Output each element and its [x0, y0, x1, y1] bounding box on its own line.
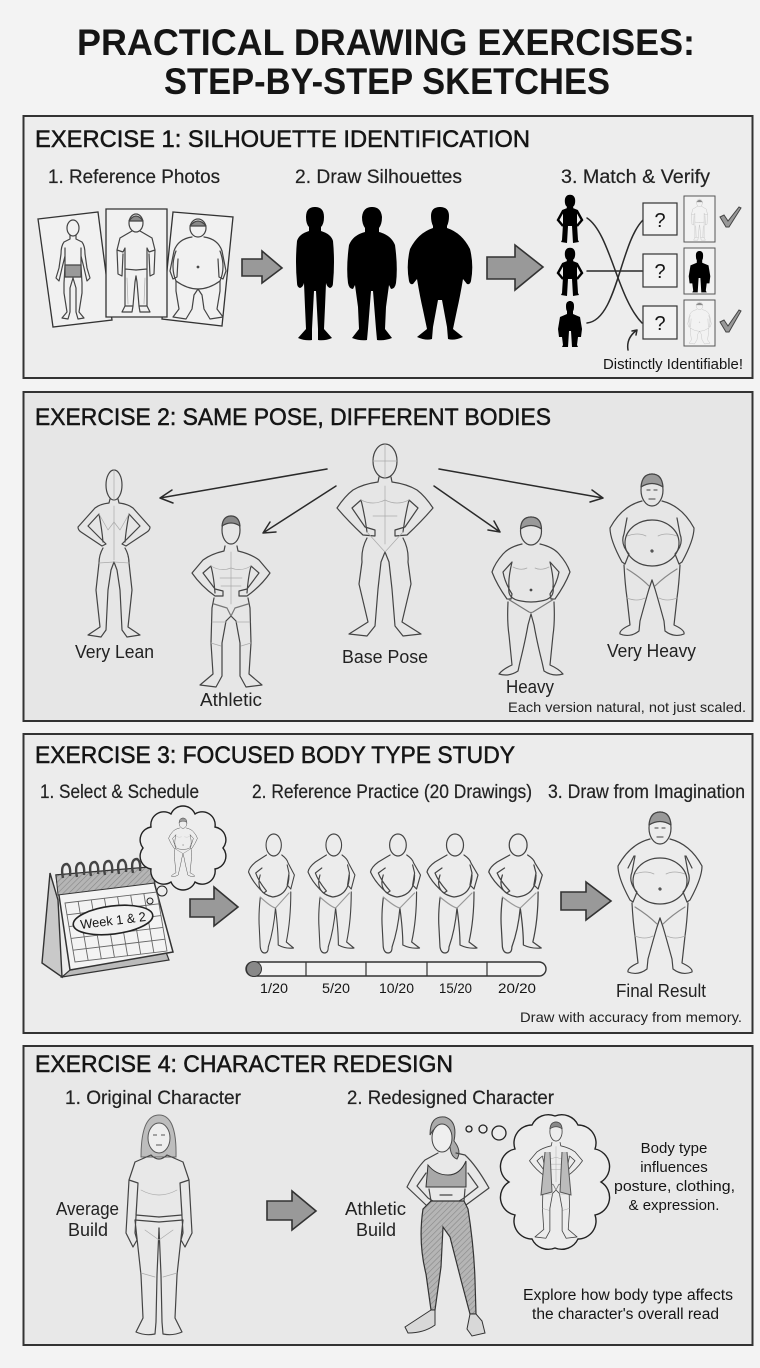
title: STEP-BY-STEP SKETCHES: [164, 61, 610, 102]
figure: original character: [126, 1115, 192, 1335]
question boxes: ?: [654, 313, 666, 335]
question boxes: [643, 203, 677, 339]
figure: heavy: [492, 517, 570, 675]
figure: base pose: [337, 444, 433, 636]
step 1 label: 1. Reference Photos: [48, 167, 220, 188]
heading: exercise 3: EXERCISE 3: FOCUSED BODY TYPE STUDY: [35, 742, 515, 769]
small curved arrow: [628, 330, 637, 350]
label: average build: Average: [56, 1199, 119, 1219]
arrow: [487, 245, 543, 290]
thought bubble: [500, 1115, 610, 1249]
panel: exercise 3: [24, 734, 752, 1033]
step 3 label: 3. Draw from Imagination: [548, 782, 745, 803]
progress labels: 1/20: [260, 980, 288, 996]
question boxes: ?: [654, 261, 666, 283]
step 1 label: 1. Original Character: [65, 1088, 242, 1109]
side note: posture, clothing,: [614, 1178, 735, 1195]
step 3 label: 3. Match & Verify: [561, 167, 711, 188]
reference photos: [38, 209, 233, 327]
heading: exercise 2: EXERCISE 2: SAME POSE, DIFFERENT BODIES: [35, 404, 551, 431]
side note: influences: [640, 1159, 708, 1176]
panel: exercise 1: [24, 116, 752, 378]
label: very heavy: Very Heavy: [607, 641, 696, 661]
label: final result: Final Result: [616, 981, 706, 1001]
small silhouettes: [558, 196, 582, 347]
side note: [614, 1140, 735, 1214]
step 1 label: 1. Select & Schedule: [40, 782, 199, 803]
label: very lean: Very Lean: [75, 642, 154, 662]
panel: exercise 4: [24, 1046, 752, 1345]
step 2 label: 2. Draw Silhouettes: [295, 167, 462, 188]
progress labels: 20/20: [498, 980, 536, 996]
label: average build: Build: [68, 1220, 108, 1240]
arrow: [561, 882, 611, 920]
heading: exercise 4: EXERCISE 4: CHARACTER REDESIGN: [35, 1051, 453, 1078]
progress labels: 10/20: [379, 980, 414, 996]
arrow: [190, 887, 238, 926]
figure: athletic: [192, 516, 270, 687]
progress labels: 15/20: [439, 980, 472, 996]
side note: Body type: [641, 1140, 707, 1157]
title: [77, 22, 695, 102]
step 2 label: 2. Reference Practice (20 Drawings): [252, 782, 532, 803]
arrow: [267, 1191, 316, 1230]
figure: very heavy: [610, 474, 694, 635]
bottom note: [523, 1287, 733, 1323]
progress labels: [260, 980, 536, 996]
panel: exercise 2: [24, 392, 752, 721]
progress labels: 5/20: [322, 980, 350, 996]
label: athletic build: Build: [356, 1220, 396, 1240]
icon: calendar: Week 1 & 2: [79, 909, 147, 932]
thought bubble: [140, 806, 226, 904]
matching lines: [587, 218, 643, 323]
bottom note: Explore how body type affects: [523, 1287, 733, 1304]
thought circles: [466, 1125, 506, 1140]
icon: calendar: [42, 859, 173, 977]
label: average build: [56, 1199, 119, 1240]
title: PRACTICAL DRAWING EXERCISES:: [77, 22, 695, 63]
figure: final result: [618, 812, 702, 973]
note: Each version natural, not just scaled.: [508, 699, 746, 715]
label: heavy: Heavy: [506, 677, 554, 697]
label: base pose: Base Pose: [342, 647, 428, 667]
check marks: [720, 207, 741, 332]
label: athletic build: Athletic: [345, 1199, 406, 1219]
step 2 label: 2. Redesigned Character: [347, 1088, 555, 1109]
question boxes: ?: [654, 210, 666, 232]
heading: exercise 1: EXERCISE 1: SILHOUETTE IDENTIFICATION: [35, 126, 530, 153]
label: athletic build: [345, 1199, 406, 1240]
callout: distinctly identifiable: Distinctly Identifiable!: [603, 356, 743, 373]
bottom note: the character's overall read: [532, 1306, 719, 1323]
progress figures: [248, 834, 542, 953]
arrow: [242, 251, 282, 283]
arrows from base pose: [160, 469, 603, 533]
note: Draw with accuracy from memory.: [520, 1009, 742, 1025]
label: athletic: Athletic: [200, 690, 262, 710]
figure: redesigned character: [405, 1117, 489, 1336]
figure: very lean: [78, 470, 150, 637]
side note: & expression.: [629, 1197, 719, 1214]
black silhouettes: [296, 207, 472, 340]
verification thumbnails: [684, 196, 715, 346]
progress bar: [246, 962, 546, 976]
